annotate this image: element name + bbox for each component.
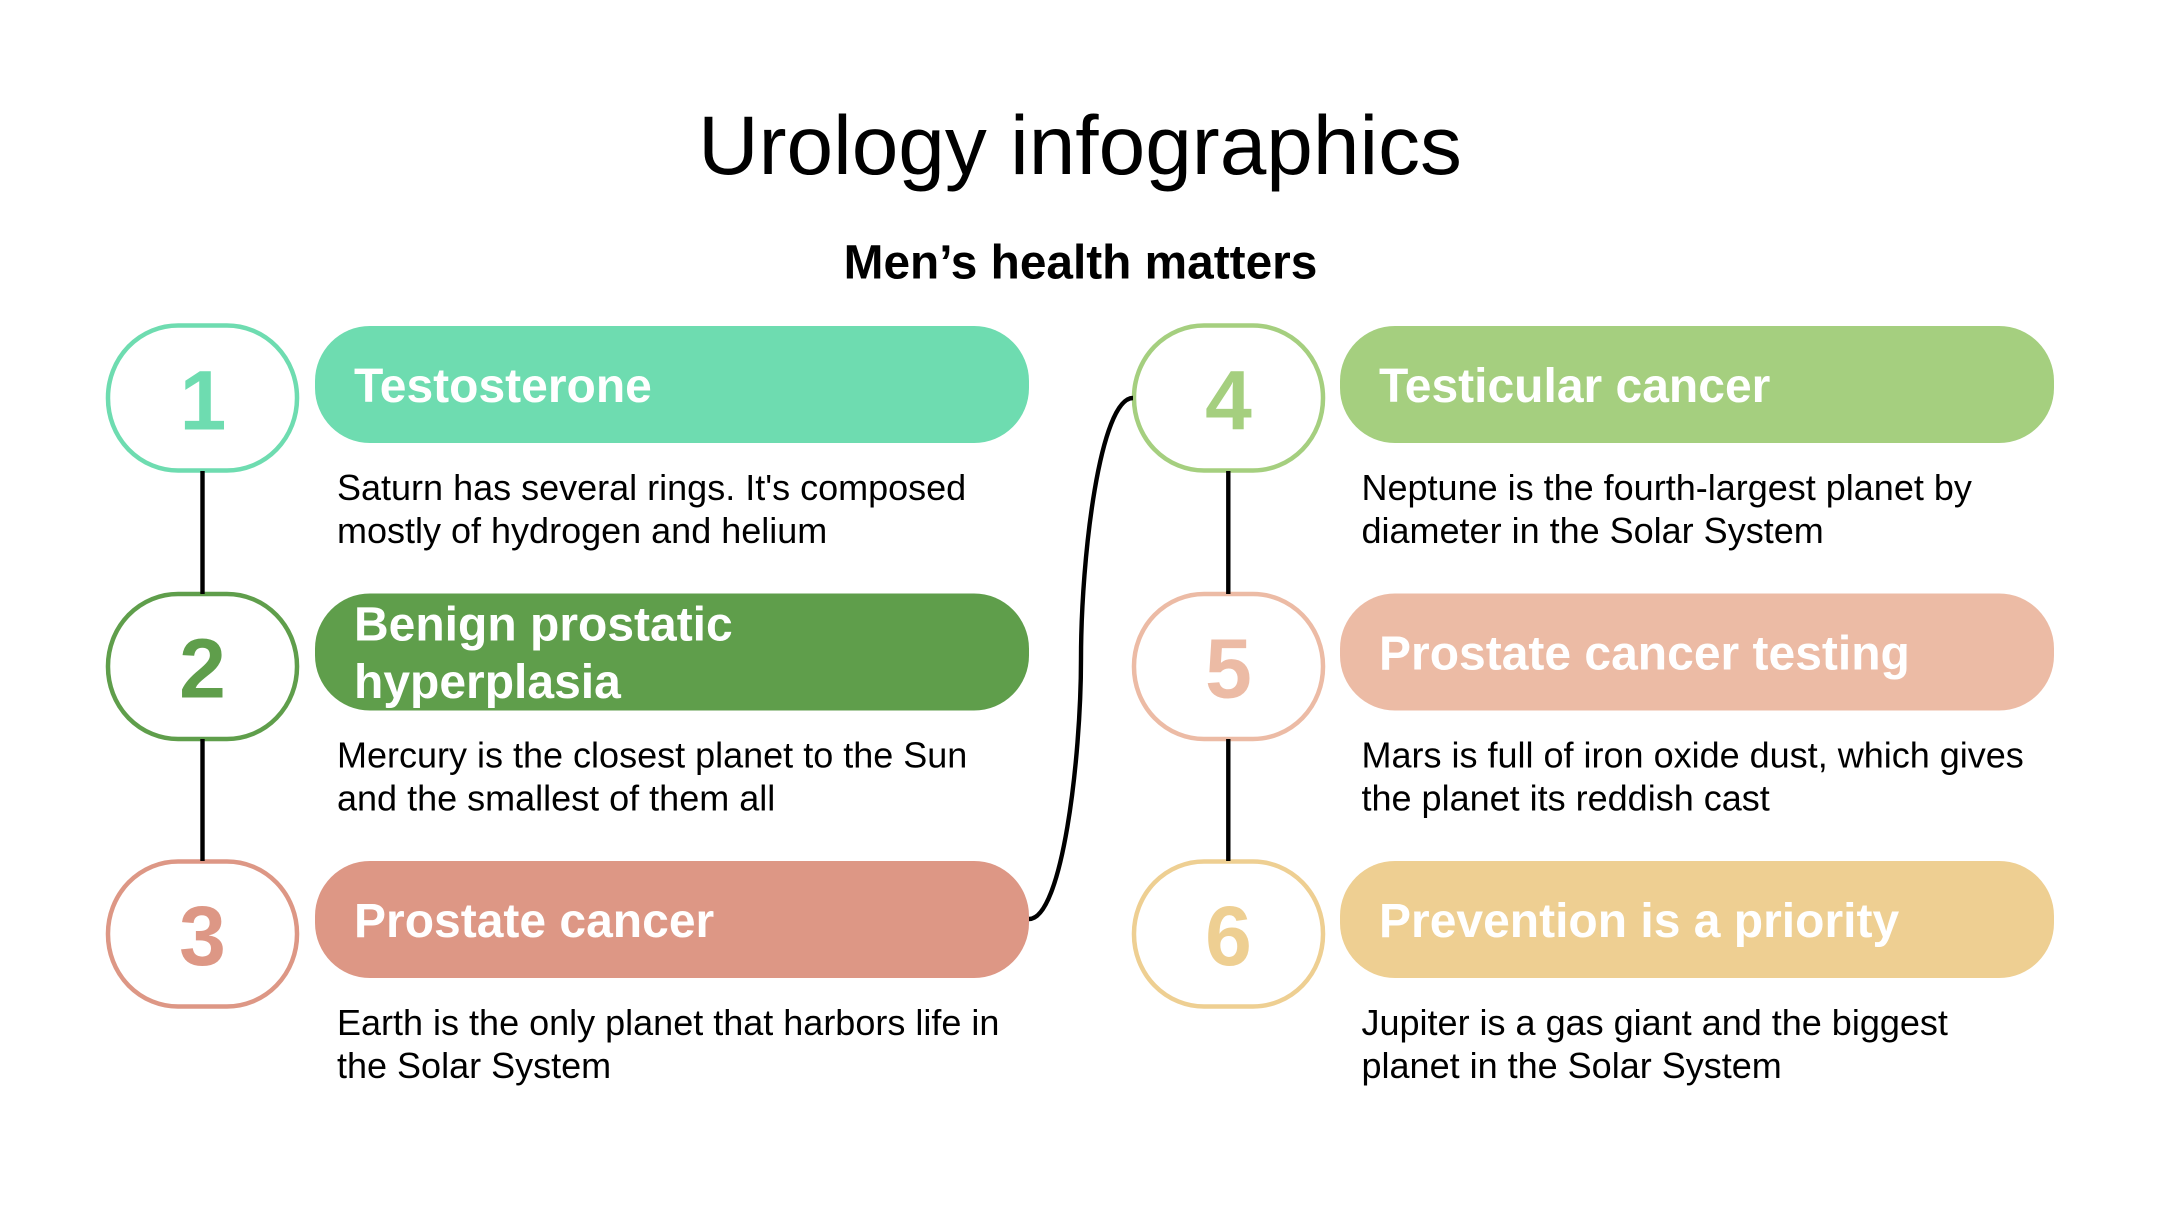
- description 6: Jupiter is a gas giant and the biggest: [1362, 1002, 1948, 1043]
- description 5: the planet its reddish cast: [1362, 778, 1770, 818]
- description 4: Neptune is the fourth-largest planet by: [1362, 467, 1972, 508]
- description 1: mostly of hydrogen and helium: [337, 510, 827, 551]
- description 6: planet in the Solar System: [1362, 1045, 1782, 1086]
- heading pill 1: [315, 326, 1029, 443]
- description 3: the Solar System: [337, 1045, 611, 1086]
- connector: 1 to 2: [200, 471, 205, 594]
- connector: 5 to 6: [1226, 739, 1231, 861]
- connector: curved 3 to 4: [1029, 398, 1133, 919]
- number badge 2: [108, 594, 297, 739]
- heading pill 1: Testosterone: [354, 360, 652, 413]
- number badge 6: 6: [1205, 889, 1252, 983]
- description 4: diameter in the Solar System: [1362, 510, 1824, 551]
- number badge 4: [1134, 326, 1323, 470]
- connector: 4 to 5: [1226, 471, 1231, 594]
- panel: item 5: [1134, 594, 2054, 818]
- heading pill 4: [1340, 326, 2054, 443]
- panel: item 3: [108, 861, 1029, 1086]
- description 2: Mercury is the closest planet to the Sun: [337, 734, 967, 776]
- number badge 2: 2: [179, 622, 226, 716]
- heading pill 5: [1340, 594, 2054, 710]
- panel: item 4: [1134, 326, 2054, 551]
- heading pill 6: Prevention is a priority: [1379, 895, 1899, 948]
- description 1: Saturn has several rings. It's composed: [337, 467, 966, 508]
- panel: item 6: [1134, 861, 2054, 1086]
- heading pill 2: Benign prostatic: [354, 598, 733, 652]
- title: Urology infographics: [698, 98, 1462, 192]
- number badge 1: [108, 326, 297, 470]
- heading pill 4: Testicular cancer: [1379, 360, 1770, 413]
- subtitle: Men’s health matters: [844, 236, 1317, 290]
- heading pill 2: hyperplasia: [354, 656, 621, 709]
- number badge 3: [108, 862, 297, 1006]
- description 3: Earth is the only planet that harbors life in: [337, 1002, 999, 1043]
- number badge 1: 1: [180, 354, 226, 448]
- panel: item 2: [108, 594, 1029, 818]
- heading pill 5: Prostate cancer testing: [1379, 628, 1910, 680]
- heading pill 3: [315, 861, 1029, 978]
- number badge 6: [1134, 862, 1323, 1006]
- heading pill 6: [1340, 861, 2054, 978]
- description 5: Mars is full of iron oxide dust, which gives: [1362, 734, 2024, 776]
- heading pill 3: Prostate cancer: [354, 895, 714, 948]
- panel: item 1: [108, 326, 1029, 551]
- number badge 3: 3: [179, 889, 226, 983]
- connector: 2 to 3: [200, 739, 205, 861]
- number badge 5: [1134, 594, 1323, 739]
- number badge 4: 4: [1205, 354, 1252, 448]
- heading pill 2: [315, 594, 1029, 710]
- description 2: and the smallest of them all: [337, 778, 775, 818]
- number badge 5: 5: [1205, 622, 1252, 716]
